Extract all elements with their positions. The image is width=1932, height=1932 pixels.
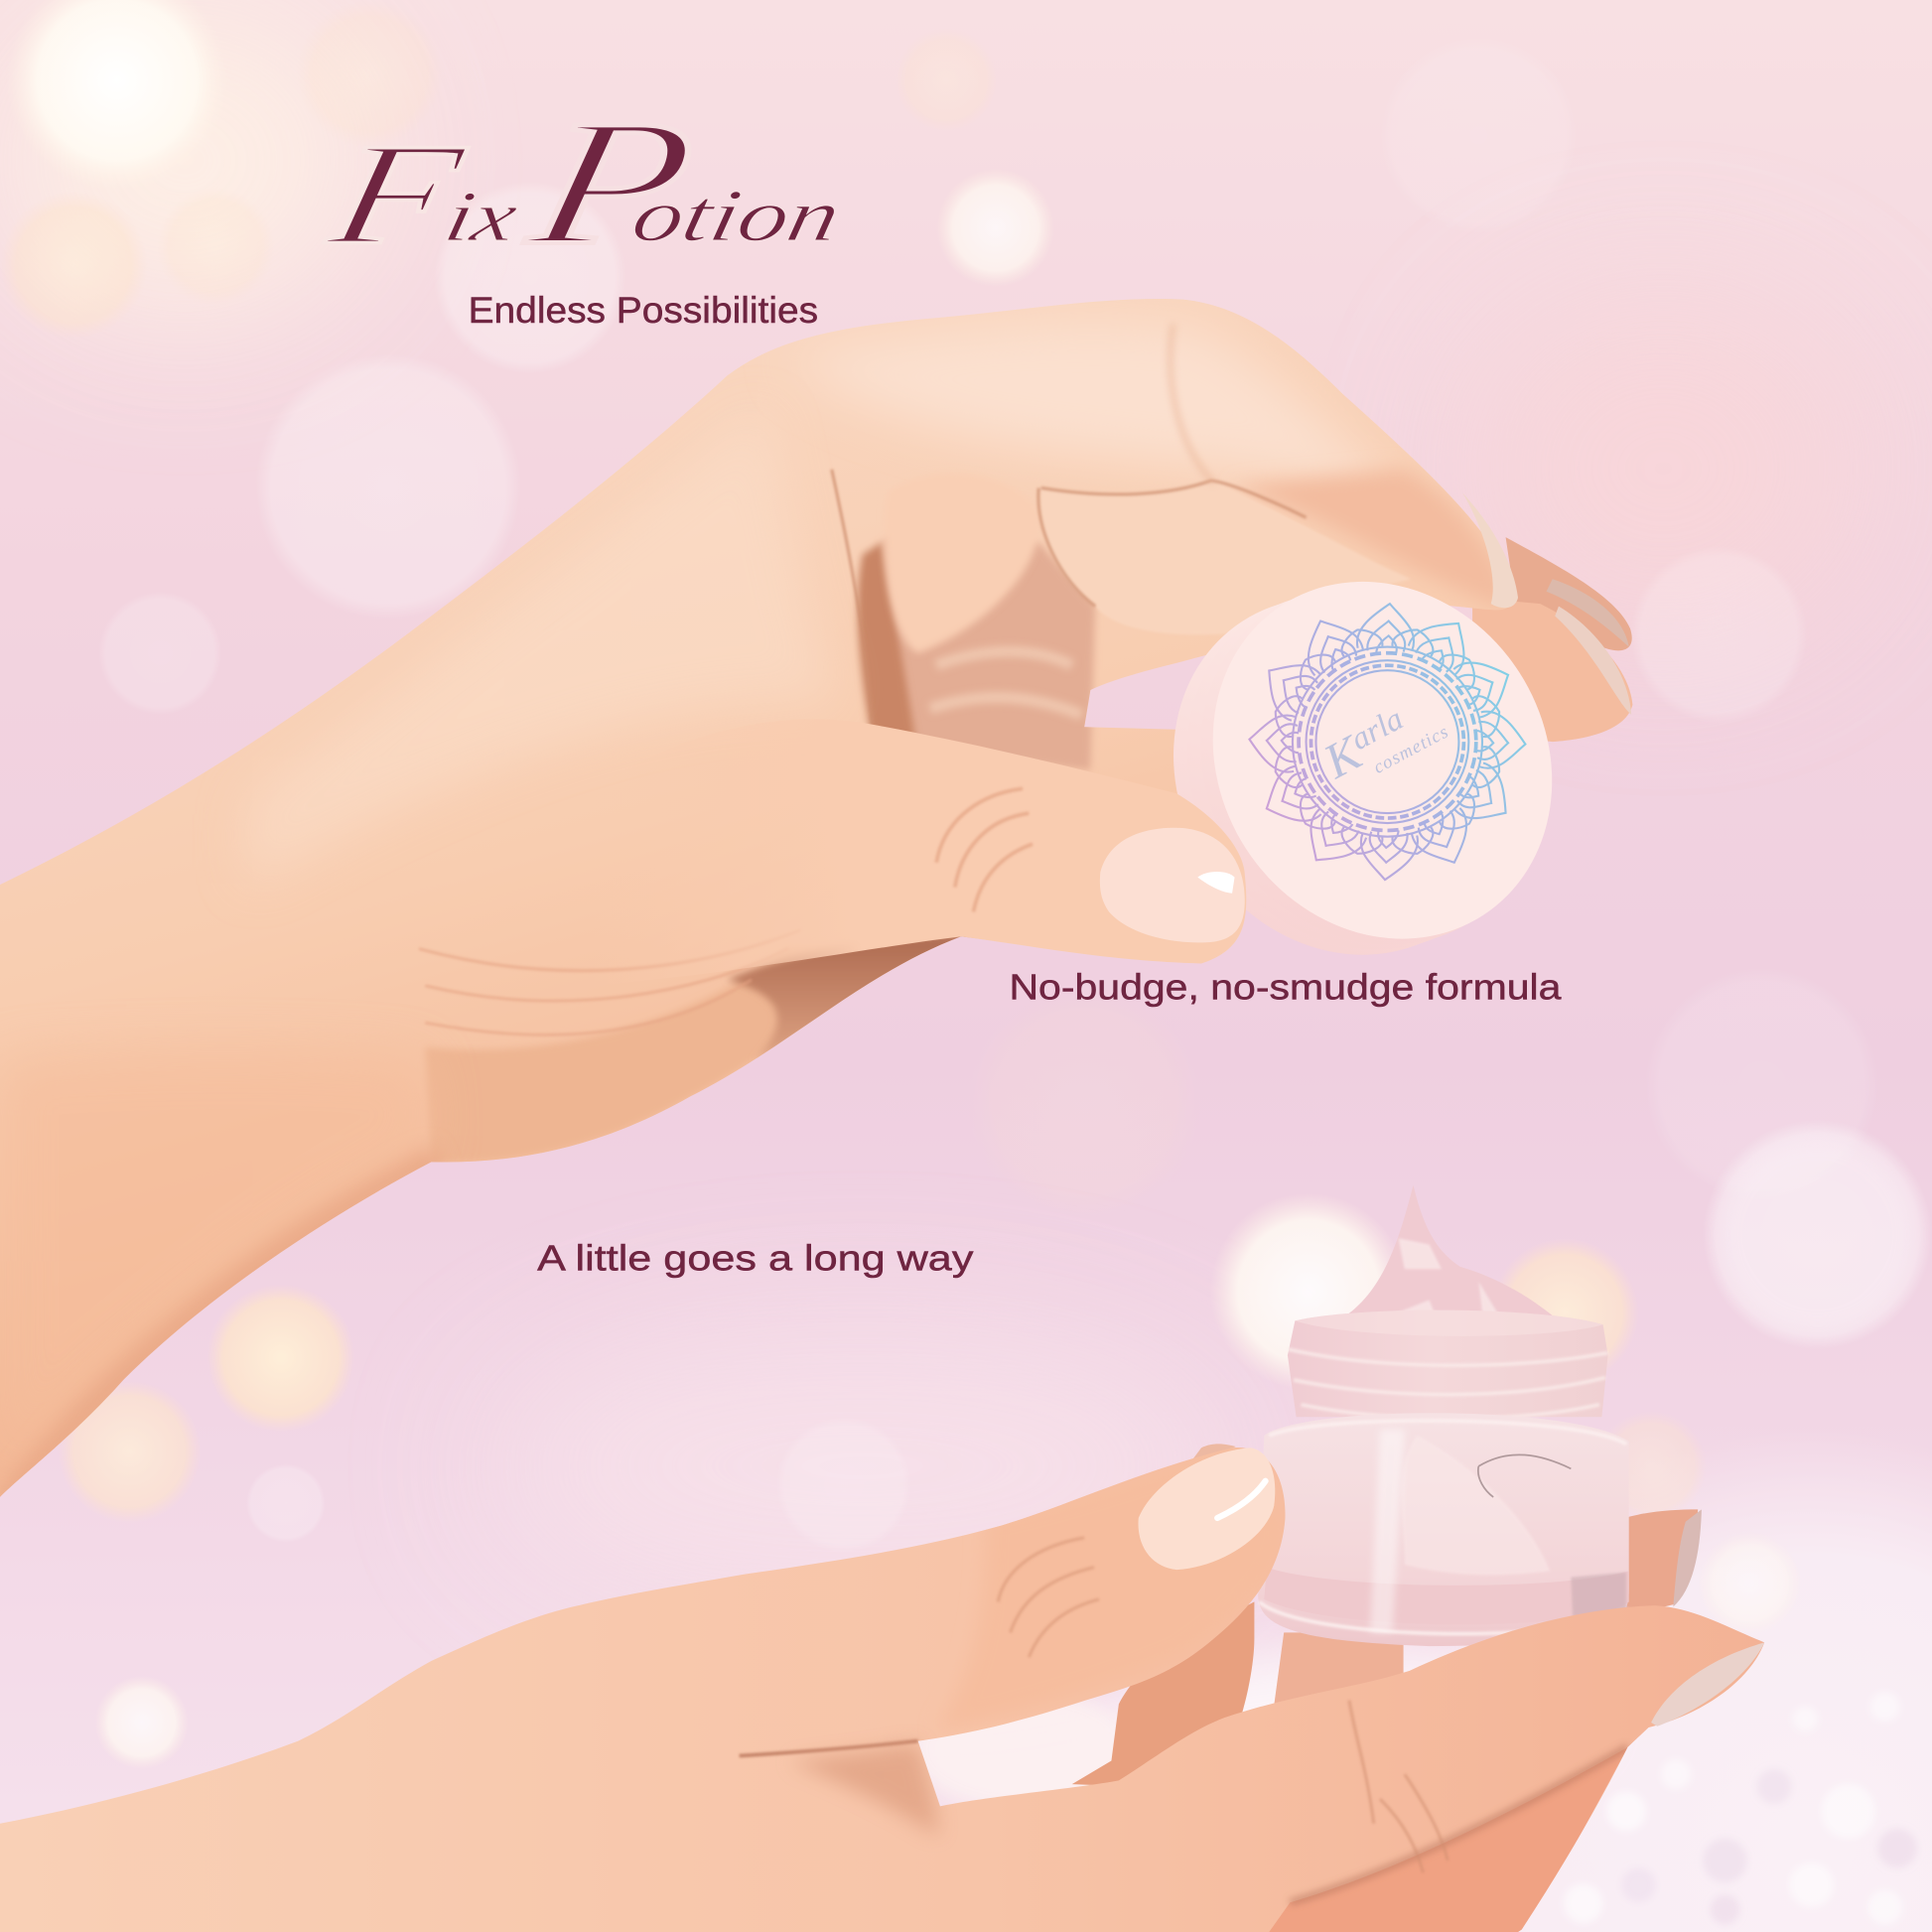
index finger tip shading (1248, 465, 1493, 602)
index finger highlight (822, 316, 1374, 481)
palm hollow (882, 531, 1095, 770)
upper hand back fingers (1472, 537, 1632, 742)
thumb top shade (936, 1448, 1288, 1731)
title: Fix Potion: P (515, 82, 710, 282)
gel swoop highlight (1402, 1436, 1550, 1575)
palm under finger (1269, 1747, 1627, 1932)
palm heel lobe (425, 984, 777, 1162)
palm hollow bands (930, 651, 1082, 715)
web shadow (788, 1743, 939, 1836)
curled middle finger (1043, 496, 1408, 633)
upper hand (0, 299, 1505, 1497)
thumb pad creases (998, 1538, 1099, 1657)
lid face (1146, 516, 1619, 1004)
jar body (1258, 1413, 1629, 1646)
lower thumb nail (1138, 1448, 1764, 1726)
brand wordmark (1314, 684, 1451, 797)
index knuckle crease (1171, 324, 1213, 483)
product lid (1106, 516, 1619, 1020)
thumb knuckle creases (936, 788, 1033, 911)
glass reflection (1370, 1430, 1405, 1632)
finger knuckle texture (1349, 1701, 1448, 1872)
neck threads (1288, 1349, 1608, 1419)
title: Fix Potion: F (318, 114, 476, 275)
wrist shade (0, 1050, 431, 1478)
brand wordmark: K (1314, 724, 1372, 789)
title: Fix Potion: ix (439, 177, 524, 256)
gel highlights (1368, 1238, 1501, 1333)
index finger nail (1462, 492, 1518, 608)
subtitle: Endless Possibilities: Endless Possibilities (469, 289, 818, 331)
sparkle floor bottom right (1564, 1692, 1917, 1925)
thumb nail (1100, 828, 1245, 942)
brand wordmark: arla (1344, 700, 1409, 757)
lower hand (0, 1442, 1774, 1932)
mandala emblem (1232, 579, 1540, 899)
palm dark under thumb (727, 934, 973, 1062)
jar neck (1288, 1311, 1608, 1417)
gel jar (1258, 1185, 1629, 1646)
finger creases (830, 469, 1307, 623)
thumb base fold (858, 542, 918, 752)
index fingertip nail (1651, 1642, 1764, 1726)
palm creases (419, 930, 801, 1035)
upper thumb (592, 492, 1518, 986)
fold lobe (880, 529, 1037, 654)
thumb nail highlight (1217, 1481, 1266, 1518)
glass crease (1478, 1454, 1571, 1497)
body base band (1264, 1568, 1629, 1624)
gel peak (1345, 1185, 1568, 1349)
under-finger dark line (1290, 1747, 1627, 1902)
nail highlight (1197, 872, 1235, 894)
title: Fix Potion (318, 82, 848, 282)
neck rim (1295, 1311, 1603, 1336)
web crease (740, 1741, 918, 1756)
base dark reflection (1571, 1573, 1626, 1636)
shoulder highlight (1269, 1421, 1626, 1445)
wrist lower shadow (0, 1146, 444, 1516)
back of hand highlight (257, 477, 814, 858)
caption: no-budge: No-budge, no-smudge formula (1009, 967, 1563, 1008)
title: Fix Potion: otion (625, 176, 848, 257)
lower hand back fingers (1072, 1444, 1702, 1787)
base rim (1259, 1601, 1629, 1634)
brand wordmark: cosmetics (1370, 722, 1451, 778)
caption: a little goes a long way: A little goes a long way (537, 1238, 973, 1279)
